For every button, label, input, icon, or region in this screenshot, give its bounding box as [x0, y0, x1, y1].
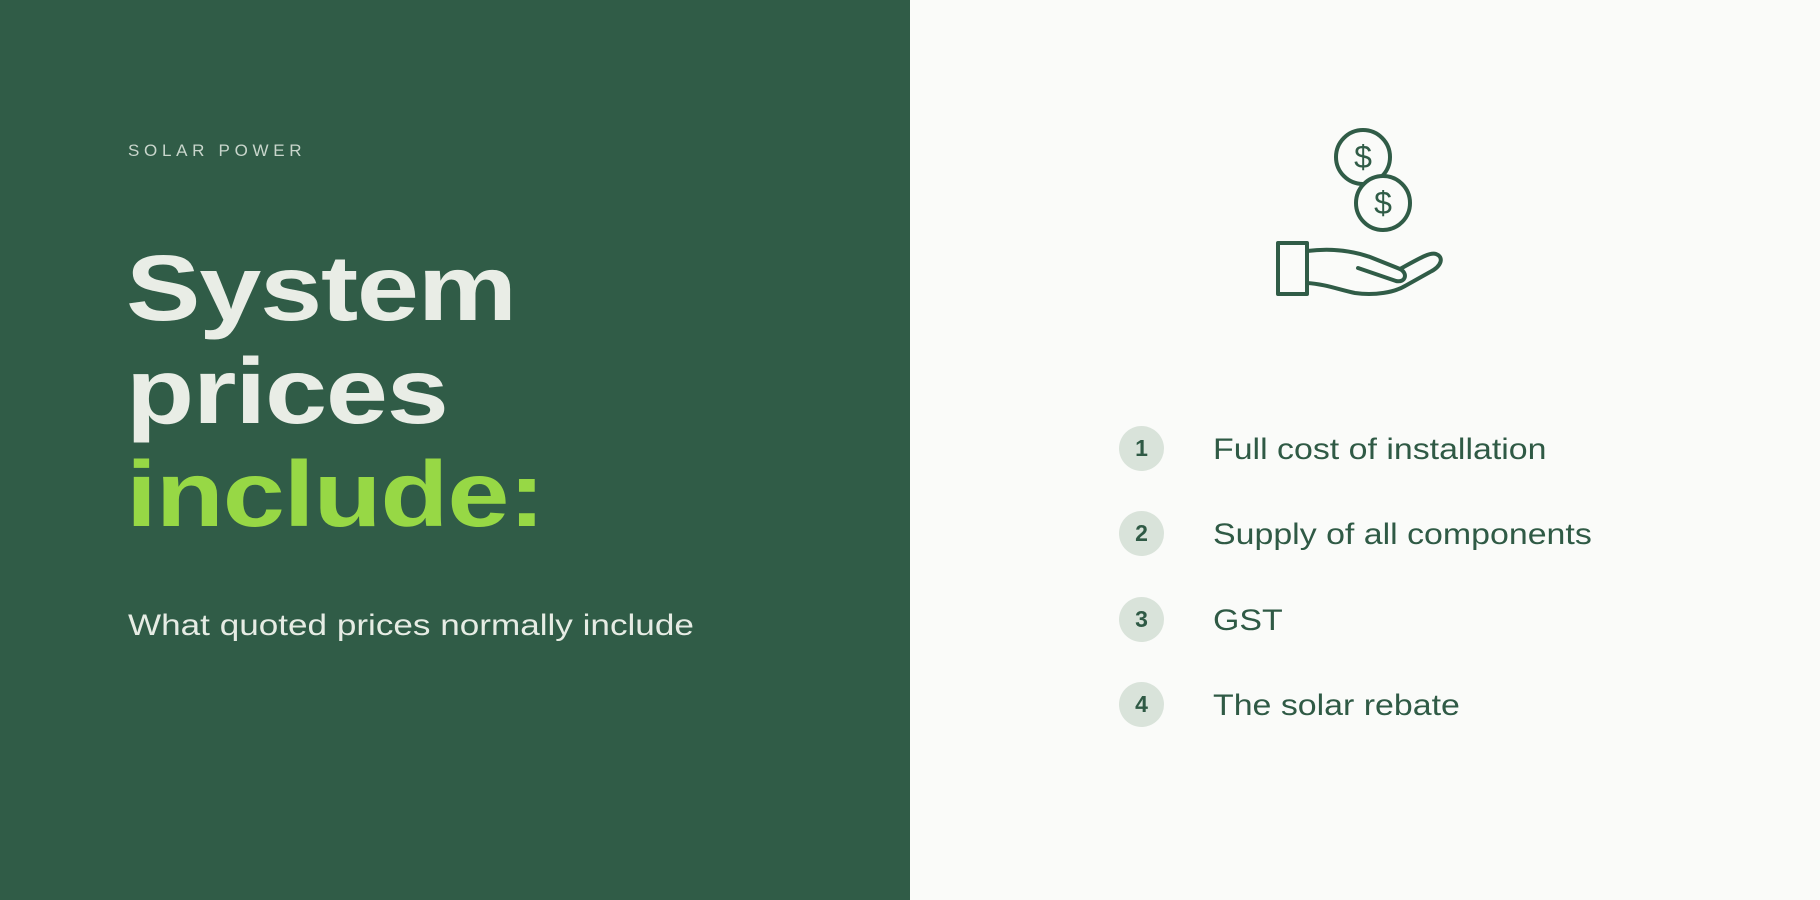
title: prices	[126, 339, 448, 443]
icon: hand with coins: $	[1354, 139, 1372, 175]
title	[126, 236, 544, 546]
subtitle: What quoted prices normally include	[128, 609, 694, 642]
list item 4: The solar rebate	[1213, 689, 1460, 722]
panel: left green	[0, 0, 910, 900]
list item 1: 1	[1135, 435, 1148, 461]
kicker: solar power: SOLAR POWER	[128, 141, 306, 160]
icon: hand with coins: $	[1374, 185, 1392, 221]
list item 1: Full cost of installation	[1213, 433, 1547, 466]
list item 4: 4	[1135, 691, 1148, 717]
list item 2: Supply of all components	[1213, 518, 1592, 551]
title: include:	[126, 442, 544, 546]
list item 3: GST	[1213, 604, 1283, 637]
list item 4	[1119, 682, 1460, 727]
list item 2	[1119, 511, 1592, 556]
list item 1	[1119, 426, 1547, 471]
list item 3	[1119, 597, 1283, 642]
list item 2: 2	[1135, 520, 1148, 546]
list item 3: 3	[1135, 606, 1148, 632]
icon: hand with coins	[1276, 128, 1443, 296]
title: System	[126, 236, 516, 340]
